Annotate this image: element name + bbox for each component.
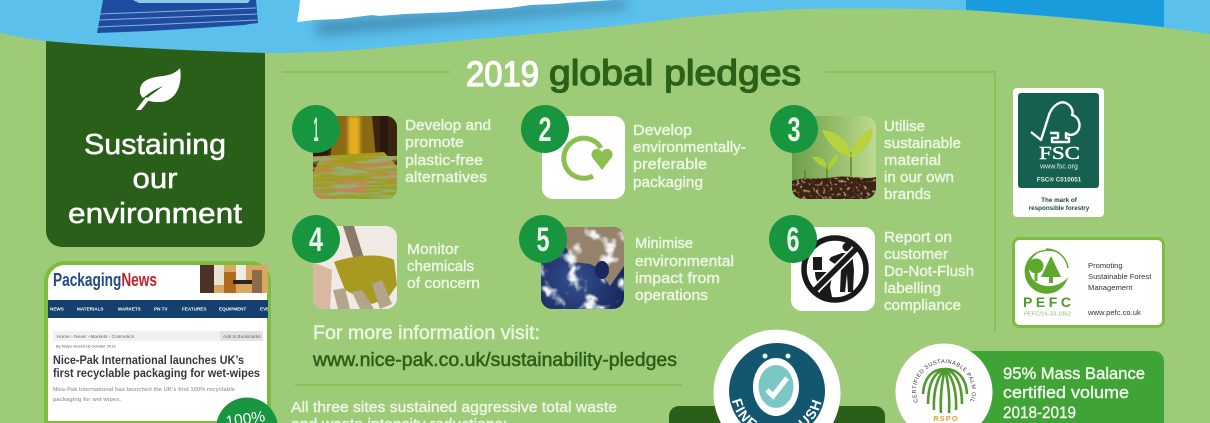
panel: fine to flush (669, 330, 885, 423)
text: pledge 4: Monitor (407, 241, 459, 258)
article summary (53, 387, 236, 403)
icon: pefc emblem: PEFC (1023, 294, 1071, 310)
article headline: first recyclable packaging for wet-wipes (53, 366, 260, 380)
navigation bar: FEATURES (182, 306, 206, 312)
breadcrumb strip: By Naiyo Guesti 18 October 2019 (56, 344, 116, 348)
text: pledge 1: plastic-free (405, 152, 483, 169)
text: pledge 2 (633, 122, 746, 191)
text: pefc description: www.pefc.co.uk (1087, 308, 1141, 317)
pledge 4: chemicals of concern (292, 215, 480, 309)
text: more information link: For more information visit: (313, 323, 540, 344)
text: pledge 3: in our own (884, 169, 954, 186)
article summary: packaging for wet wipes. (53, 397, 121, 403)
icon: rspo badge: RSPO (933, 414, 959, 423)
number badge 1: 1 (314, 111, 318, 149)
number badge 3 (770, 105, 818, 153)
number badge 6: 6 (786, 221, 800, 259)
navigation bar (48, 300, 269, 318)
heading: sustaining our environment: our (132, 163, 178, 195)
title: 2019 global pledges: global pledges (549, 52, 801, 93)
text: pledge 6: labelling (884, 280, 941, 297)
logo: pefc card (1014, 238, 1164, 326)
photo: seedlings in soil (792, 116, 876, 199)
text: pledge 6: compliance (884, 297, 961, 314)
text: pefc description (1087, 261, 1152, 317)
article headline (53, 353, 260, 380)
text: mass balance: certified volume (1003, 383, 1129, 402)
text: pefc description: Management (1088, 283, 1133, 292)
masthead: packaging news logo: PackagingNews (53, 270, 157, 290)
text: fsc lettering: responsible forestry (1029, 205, 1090, 212)
panel: sustaining our environment (46, 41, 265, 247)
text: pledge 1: Develop and (405, 117, 491, 134)
text: mass balance: 2018-2019 (1003, 403, 1076, 422)
heading: sustaining our environment (68, 129, 242, 230)
heading: sustaining our environment: environment (68, 198, 242, 230)
icon: pefc emblem (1023, 249, 1071, 318)
pledge 1: plastic-free alternatives (292, 105, 491, 199)
pledge 5: environmental impact (519, 215, 734, 309)
pledge 3: sustainable material (770, 105, 961, 203)
number badge 3: 3 (788, 111, 800, 149)
pledge 2: environmentally-preferable packaging (521, 105, 746, 199)
text: pledge 6: Do-Not-Flush (884, 263, 974, 280)
text: waste reductions (291, 399, 617, 423)
navigation bar: EVE (260, 306, 269, 312)
divider (295, 384, 682, 386)
text: pledge 3: brands (884, 186, 931, 203)
text: pledge 5: impact from (635, 270, 720, 287)
breadcrumb strip: Home › News › Markets › Cosmetics (57, 334, 135, 340)
text: pefc description: Sustainable Forest (1088, 272, 1152, 281)
navigation bar: NEWS (50, 306, 64, 312)
badge: 100% (216, 398, 278, 423)
text: pledge 5: environmental (635, 253, 734, 270)
text: pledge 4 (407, 241, 480, 292)
text: mass balance (1003, 364, 1145, 422)
text: pledge 6: Report on (884, 229, 952, 246)
text: pledge 2: preferable (633, 156, 707, 173)
text: mass balance: 95% Mass Balance (1003, 364, 1145, 383)
icon: leaf (136, 68, 181, 110)
text: pledge 1: alternatives (405, 169, 487, 186)
text: pledge 2: environmentally- (633, 139, 746, 156)
number badge 5 (519, 215, 567, 263)
icon: fine to flush badge (714, 330, 840, 423)
text: pledge 2: packaging (633, 174, 703, 191)
text: pledge 5: Minimise (635, 235, 693, 252)
logo: fsc card (1013, 88, 1104, 217)
text: pledge 2: Develop (633, 122, 692, 139)
icon: do not flush tile (791, 227, 875, 311)
text: pledge 1 (405, 117, 491, 186)
header: dark blue panel (966, 0, 1164, 27)
masthead photo (200, 265, 268, 293)
article headline: Nice-Pak International launches UK’s (53, 353, 244, 367)
heading: sustaining our environment: Sustaining (84, 129, 226, 161)
photo: testing substance (313, 226, 397, 309)
text: fsc lettering: FSC® C010051 (1037, 176, 1082, 184)
text: pledge 4: of concern (407, 275, 480, 292)
number badge 4 (292, 215, 340, 263)
header band: sky blue wave (0, 0, 1210, 53)
text: fsc lettering (1029, 143, 1090, 212)
text: fsc lettering: The mark of (1041, 197, 1078, 204)
text: pledge 6 (884, 229, 974, 314)
text: more information link: www.nice-pak.co.uk/sustainability-pledges (312, 350, 677, 371)
navigation bar: MARKETS (118, 306, 141, 312)
navigation bar: MATERIALS (77, 306, 103, 312)
header: torn paper note with shadow (297, 0, 628, 35)
breadcrumb strip: Add to Bookmarks (223, 334, 261, 339)
number badge 2: 2 (538, 111, 552, 149)
text: pledge 5: operations (635, 287, 708, 304)
text: pledge 4: chemicals (407, 258, 474, 275)
heading rule: title frame (282, 72, 995, 332)
panel: rspo palm oil (896, 344, 1164, 423)
text: pledge 6: customer (884, 246, 948, 263)
icon: rspo badge (896, 344, 992, 423)
icon: rspo badge: CERTIFIED SUSTAINABLE PALM OIL (912, 359, 976, 402)
pledge 6: do-not-flush labelling (769, 215, 974, 314)
text: pefc description: Promoting (1088, 261, 1123, 270)
panel: packaging news article (46, 263, 278, 423)
text: pledge 3: sustainable (884, 135, 961, 152)
text: fsc lettering: www.fsc.org (1039, 164, 1078, 170)
text: pledge 3 (884, 118, 961, 203)
number badge 5: 5 (536, 221, 550, 259)
title: 2019 global pledges (466, 52, 801, 94)
number badge 4: 4 (309, 221, 323, 259)
icon: recycle heart tile (542, 116, 625, 199)
text: more information link (312, 323, 677, 371)
icon: pefc emblem: PEFC/16-33-1862 (1024, 312, 1071, 318)
navigation bar: PN TV (154, 306, 168, 312)
text: waste reductions: All three sites sustained aggressive total waste (291, 399, 617, 416)
text: pledge 3: material (884, 152, 941, 169)
text: pledge 1: promote (405, 134, 464, 151)
breadcrumb strip (53, 331, 263, 348)
number badge 6 (769, 215, 817, 263)
header: wipes packet (97, 0, 258, 33)
number badge 1 (292, 105, 340, 153)
text: pledge 3: Utilise (884, 118, 925, 135)
icon: fsc tree check (1031, 102, 1079, 142)
photo: earth from space (541, 227, 624, 309)
article summary: Nice-Pak International has launched the UK’s first 100% recyclable (53, 387, 236, 393)
text: pledge 5 (635, 235, 734, 304)
title: 2019 global pledges: 2019 (466, 55, 539, 94)
photo: forest path (313, 116, 397, 199)
text: fsc lettering: FSC (1039, 143, 1080, 163)
number badge 2 (521, 105, 569, 153)
navigation bar: EQUIPMENT (219, 306, 247, 312)
